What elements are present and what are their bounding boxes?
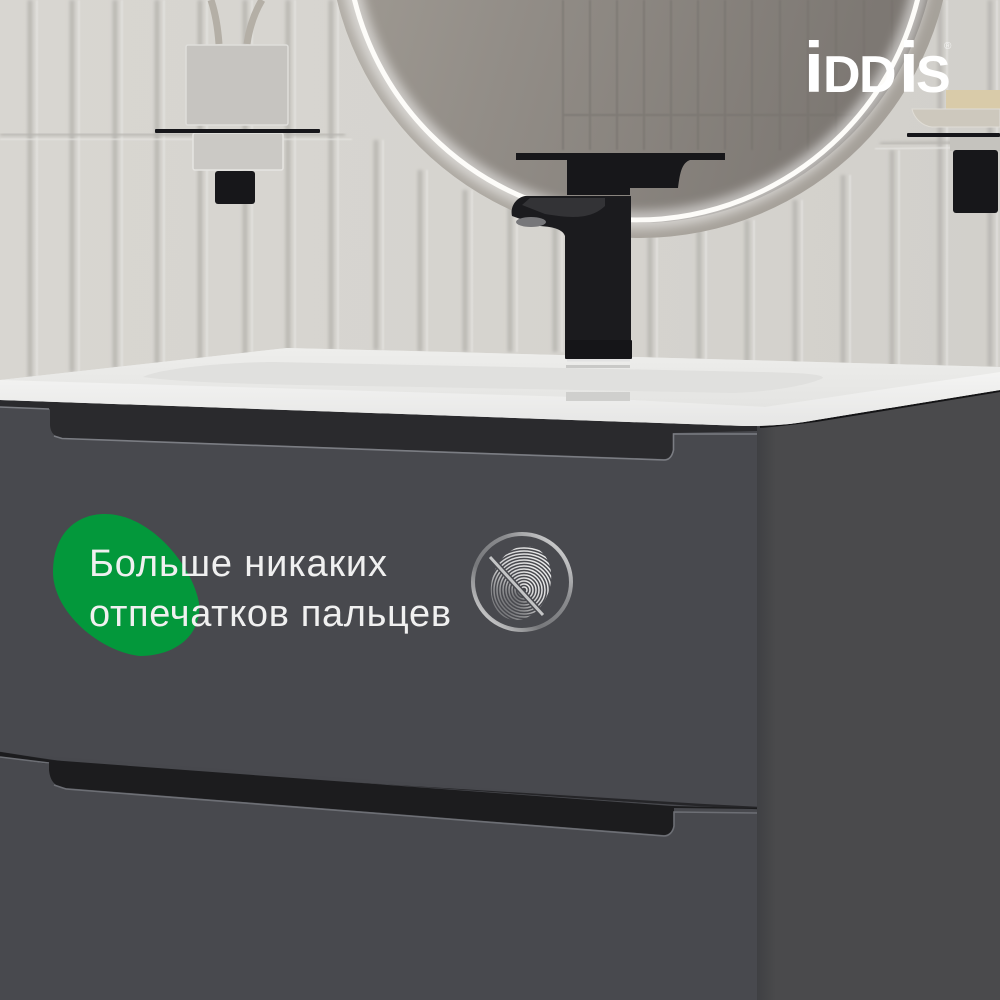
soap bar [946, 90, 1000, 110]
spout shading [522, 198, 605, 217]
soap dish [912, 109, 1000, 127]
bottom handle recess [0, 752, 757, 836]
tumbler lower part [193, 133, 283, 170]
right soap dish on shelf [907, 90, 1000, 213]
registered mark: ® [944, 41, 952, 52]
top handle recess [0, 400, 757, 460]
brand name: iDDiS [804, 29, 951, 108]
mirror tile reflection [562, 0, 725, 150]
tiled wall [0, 0, 1000, 400]
faucet body and spout [512, 196, 631, 353]
cabinet side [757, 388, 1000, 1000]
black shelf line [907, 133, 1000, 137]
aerator [516, 217, 546, 227]
bottom drawer front [0, 757, 757, 1000]
basin top surface [0, 348, 1000, 407]
drawer gap [0, 753, 757, 808]
basin silhouette [0, 348, 1000, 426]
white washbasin [0, 348, 1000, 427]
fingerprint [490, 546, 552, 620]
basin shadow line [760, 391, 1000, 427]
LED ring [346, 0, 926, 220]
icon: crossed-out fingerprint [473, 534, 571, 635]
toothbrush handles [211, 0, 262, 44]
glass tumbler [186, 45, 288, 125]
recess highlight [0, 757, 757, 836]
caption line 2: отпечатков пальцев [89, 593, 451, 635]
left tumbler on shelf [155, 0, 320, 204]
lever handle top plate [516, 153, 725, 195]
black wall bracket [215, 171, 255, 204]
prohibition ring [473, 534, 571, 630]
faucet base [565, 340, 632, 362]
faucet base reflection [566, 365, 630, 368]
faucet reflection [566, 392, 630, 401]
black wall bracket [953, 150, 998, 213]
green blob [53, 514, 199, 656]
LED ring glow [346, 0, 926, 220]
top drawer front [0, 404, 757, 808]
recess highlight [0, 407, 757, 460]
round backlit mirror [328, 0, 952, 238]
prohibition slash [490, 557, 543, 615]
black faucet [512, 153, 725, 353]
black shelf line [155, 129, 320, 133]
basin bowl [143, 362, 823, 393]
basin front edge [0, 372, 1000, 426]
dish stem [950, 136, 1000, 151]
caption [89, 543, 451, 635]
caption line 1: Больше никаких [89, 543, 387, 585]
logo [804, 29, 952, 108]
